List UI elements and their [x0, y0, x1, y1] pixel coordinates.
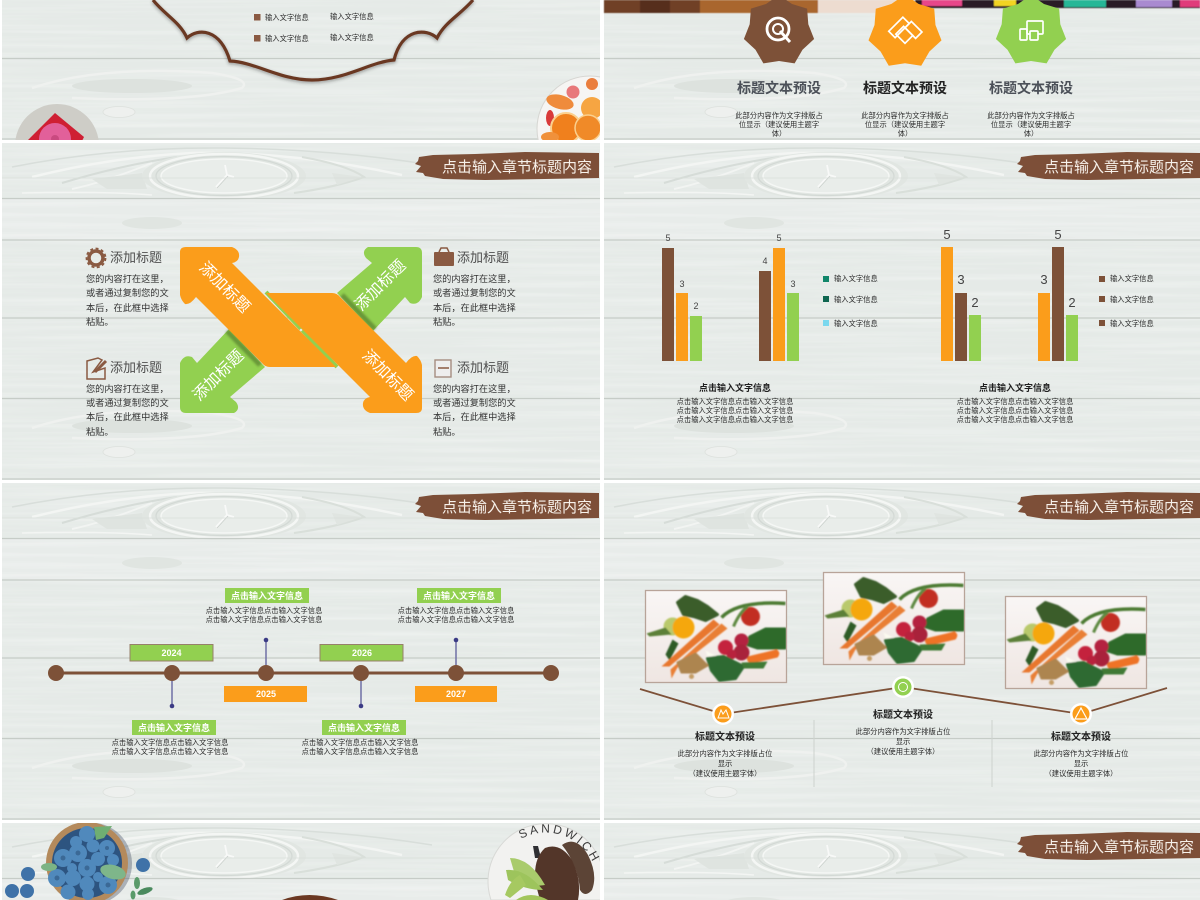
callout: top 2025	[206, 588, 322, 624]
callout: top 2025: 点击输入文字信息点击输入文字信息	[206, 606, 322, 615]
labels on arrows: 添加标题	[351, 256, 409, 314]
photo: vegetables center	[824, 572, 964, 664]
callout: bottom 2024: 点击输入文字信息点击输入文字信息	[112, 747, 228, 756]
photo: sandwich plate	[488, 823, 600, 900]
arrow: green north-east	[337, 247, 422, 331]
dividers	[814, 720, 992, 787]
text block: top left: 您的内容打在这里，	[86, 273, 169, 284]
banner: slide 6 heading	[1017, 492, 1200, 520]
year: 2026	[320, 644, 403, 661]
banner: slide 5 heading: 点击输入章节标题内容	[442, 498, 592, 516]
banner: slide 3 heading	[415, 152, 599, 180]
text block: bottom right: 添加标题	[457, 360, 509, 375]
legend: right chart: 输入文字信息	[1110, 274, 1154, 283]
bar chart: right: 3	[957, 272, 965, 287]
timeline	[48, 638, 559, 708]
caption: right chart: 点击输入文字信息点击输入文字信息	[957, 397, 1073, 406]
item: right icon and text: 显示	[1074, 759, 1088, 768]
banner: slide 8 heading	[1017, 832, 1200, 860]
scalloped frame outline	[153, 0, 473, 80]
labels on arrows: 添加标题	[359, 346, 417, 404]
text block: bottom right: 您的内容打在这里，	[433, 383, 516, 394]
legend items: 输入文字信息	[265, 34, 309, 43]
arrow: orange north-west	[180, 247, 336, 367]
bar chart: left: 2	[693, 301, 699, 311]
text block: bottom right: 粘贴。	[433, 426, 461, 437]
arrow: orange south-east	[266, 293, 422, 413]
legend: left chart	[823, 274, 878, 328]
text block: top right: 粘贴。	[433, 316, 461, 327]
bar chart: left: 3	[790, 279, 796, 289]
callout: top 2027: 点击输入文字信息点击输入文字信息	[398, 615, 514, 624]
bar chart: left	[662, 233, 799, 361]
item: green star: 体）	[1024, 129, 1038, 138]
banner: slide 5 heading	[415, 492, 599, 520]
item: brown star: 位显示（建议使用主题字	[739, 120, 819, 129]
photo: blueberry basket	[5, 822, 154, 900]
banner: slide 6 heading: 点击输入章节标题内容	[1044, 498, 1194, 516]
callout: bottom 2024: 点击输入文字信息点击输入文字信息	[112, 738, 228, 747]
legend items	[254, 12, 374, 43]
text block: bottom left: 本后，在此框中选择	[86, 411, 169, 422]
caption: right chart: 点击输入文字信息点击输入文字信息	[957, 415, 1073, 424]
text block: top left: 或者通过复制您的文	[86, 287, 169, 298]
year: 2026: 2026	[352, 648, 372, 658]
year: 2024	[130, 644, 213, 661]
callout: bottom 2026: 点击输入文字信息	[328, 722, 400, 733]
photo: sandwich plate: SANDWICH	[519, 824, 600, 861]
shadows cast on green arrows	[227, 295, 375, 365]
text block: top left: 添加标题	[110, 250, 162, 265]
legend: left chart: 输入文字信息	[834, 295, 878, 304]
connector line	[640, 687, 1167, 714]
callout: bottom 2024: 点击输入文字信息	[138, 722, 210, 733]
bar chart: left: 3	[679, 279, 685, 289]
text block: top left	[86, 248, 169, 327]
year: 2027: 2027	[446, 689, 466, 699]
banner: slide 8 heading: 点击输入章节标题内容	[1044, 838, 1194, 856]
callout: top 2027: 点击输入文字信息	[423, 590, 495, 601]
caption: right chart: 点击输入文字信息	[979, 382, 1051, 393]
callout: bottom 2024	[112, 720, 228, 756]
bar chart: right: 5	[1054, 227, 1062, 242]
legend items: 输入文字信息	[330, 12, 374, 21]
scalloped frame top	[282, 895, 338, 900]
legend items: 输入文字信息	[330, 33, 374, 42]
item: left icon and text: 标题文本预设	[695, 730, 755, 743]
callout: bottom 2026: 点击输入文字信息点击输入文字信息	[302, 738, 418, 747]
item: green star: 此部分内容作为文字排版占	[987, 111, 1075, 120]
banner: slide 4 heading	[1017, 152, 1200, 180]
item: brown star: 体）	[772, 129, 786, 138]
labels on arrows: 添加标题	[196, 258, 254, 316]
item: orange star: 此部分内容作为文字排版占	[861, 111, 949, 120]
item: right icon and text	[1034, 703, 1128, 778]
labels on arrows: 添加标题	[189, 346, 247, 404]
item: green star	[987, 0, 1075, 138]
caption: left chart: 点击输入文字信息点击输入文字信息	[677, 406, 793, 415]
legend: left chart: 输入文字信息	[834, 274, 878, 283]
caption: right chart: 点击输入文字信息点击输入文字信息	[957, 406, 1073, 415]
text block: bottom left: 添加标题	[110, 360, 162, 375]
item: right icon and text: 标题文本预设	[1051, 730, 1111, 743]
callout: bottom 2026: 点击输入文字信息点击输入文字信息	[302, 747, 418, 756]
text block: bottom right	[433, 360, 516, 437]
text block: top right: 或者通过复制您的文	[433, 287, 516, 298]
item: right icon and text: （建议使用主题字体）	[1045, 769, 1117, 778]
text block: bottom left: 您的内容打在这里，	[86, 383, 169, 394]
text block: bottom left: 或者通过复制您的文	[86, 397, 169, 408]
item: left icon and text: 显示	[718, 759, 732, 768]
panel: scalloped frame slide	[16, 0, 600, 140]
item: brown star: 标题文本预设	[737, 80, 821, 96]
center dot	[300, 329, 302, 331]
photo: vegetables left	[646, 590, 786, 682]
item: left icon and text	[678, 703, 772, 778]
item: center icon and text: （建议使用主题字体）	[867, 747, 939, 756]
text block: top right: 添加标题	[457, 250, 509, 265]
text block: top left: 本后，在此框中选择	[86, 302, 169, 313]
year: 2024: 2024	[161, 648, 182, 658]
labels on arrows	[189, 256, 417, 404]
bar chart: right: 2	[1068, 295, 1076, 310]
item: orange star: 标题文本预设	[863, 80, 947, 96]
callout: top 2027	[398, 588, 514, 624]
caption: left chart: 点击输入文字信息点击输入文字信息	[677, 397, 793, 406]
panel: three star icons slide	[604, 0, 1200, 138]
item: right icon and text: 此部分内容作为文字排版占位	[1034, 749, 1128, 758]
panel: bottom-left slide	[5, 823, 600, 900]
callout: top 2025: 点击输入文字信息	[231, 590, 303, 601]
legend: left chart: 输入文字信息	[834, 319, 878, 328]
legend: right chart: 输入文字信息	[1110, 319, 1154, 328]
item: left icon and text: （建议使用主题字体）	[689, 769, 761, 778]
bar chart: right: 3	[1040, 272, 1048, 287]
bar chart: left: 4	[762, 256, 768, 266]
year: 2025: 2025	[256, 689, 276, 699]
divider: green gap line	[266, 292, 337, 367]
text block: bottom left: 粘贴。	[86, 426, 114, 437]
bar chart: right: 5	[943, 227, 951, 242]
caption: left chart	[677, 382, 793, 424]
bar chart: left: 5	[776, 233, 782, 243]
item: orange star	[861, 0, 949, 138]
year: 2025	[224, 686, 307, 702]
item: orange star: 位显示（建议使用主题字	[865, 120, 945, 129]
arrow: green south-west	[180, 329, 265, 413]
legend: right chart	[1099, 274, 1154, 328]
panel: crossed arrows diagram	[86, 247, 516, 437]
legend: right chart: 输入文字信息	[1110, 295, 1154, 304]
text block: top right	[433, 248, 516, 327]
photo: orange fruit plate	[536, 76, 600, 140]
photo strip: cakes and cupcakes	[604, 0, 1200, 13]
photo: donut plate	[16, 104, 98, 140]
text block: top right: 本后，在此框中选择	[433, 302, 516, 313]
item: orange star: 体）	[898, 129, 912, 138]
banner: slide 3 heading: 点击输入章节标题内容	[442, 158, 592, 176]
caption: right chart	[957, 382, 1073, 424]
item: center icon and text: 标题文本预设	[873, 708, 933, 721]
callout: top 2027: 点击输入文字信息点击输入文字信息	[398, 606, 514, 615]
callout: top 2025: 点击输入文字信息点击输入文字信息	[206, 615, 322, 624]
item: center icon and text	[856, 676, 950, 756]
bar chart: left: 5	[665, 233, 671, 243]
banner: slide 4 heading: 点击输入章节标题内容	[1044, 158, 1194, 176]
item: brown star: 此部分内容作为文字排版占	[735, 111, 823, 120]
item: green star: 标题文本预设	[989, 80, 1073, 96]
item: green star: 位显示（建议使用主题字	[991, 120, 1071, 129]
item: center icon and text: 此部分内容作为文字排版占位	[856, 727, 950, 736]
text block: bottom right: 或者通过复制您的文	[433, 397, 516, 408]
item: center icon and text: 显示	[896, 737, 910, 746]
legend items: 输入文字信息	[265, 13, 309, 22]
text block: bottom left	[86, 358, 169, 437]
bar chart: right: 2	[971, 295, 979, 310]
text block: top left: 粘贴。	[86, 316, 114, 327]
item: left icon and text: 此部分内容作为文字排版占位	[678, 749, 772, 758]
caption: left chart: 点击输入文字信息	[699, 382, 771, 393]
text block: top right: 您的内容打在这里，	[433, 273, 516, 284]
callout: bottom 2026	[302, 720, 418, 756]
bar chart: right	[941, 227, 1078, 361]
year: 2027	[415, 686, 497, 702]
text block: bottom right: 本后，在此框中选择	[433, 411, 516, 422]
item: brown star	[735, 0, 823, 138]
caption: left chart: 点击输入文字信息点击输入文字信息	[677, 415, 793, 424]
photo: vegetables right	[1006, 596, 1146, 688]
